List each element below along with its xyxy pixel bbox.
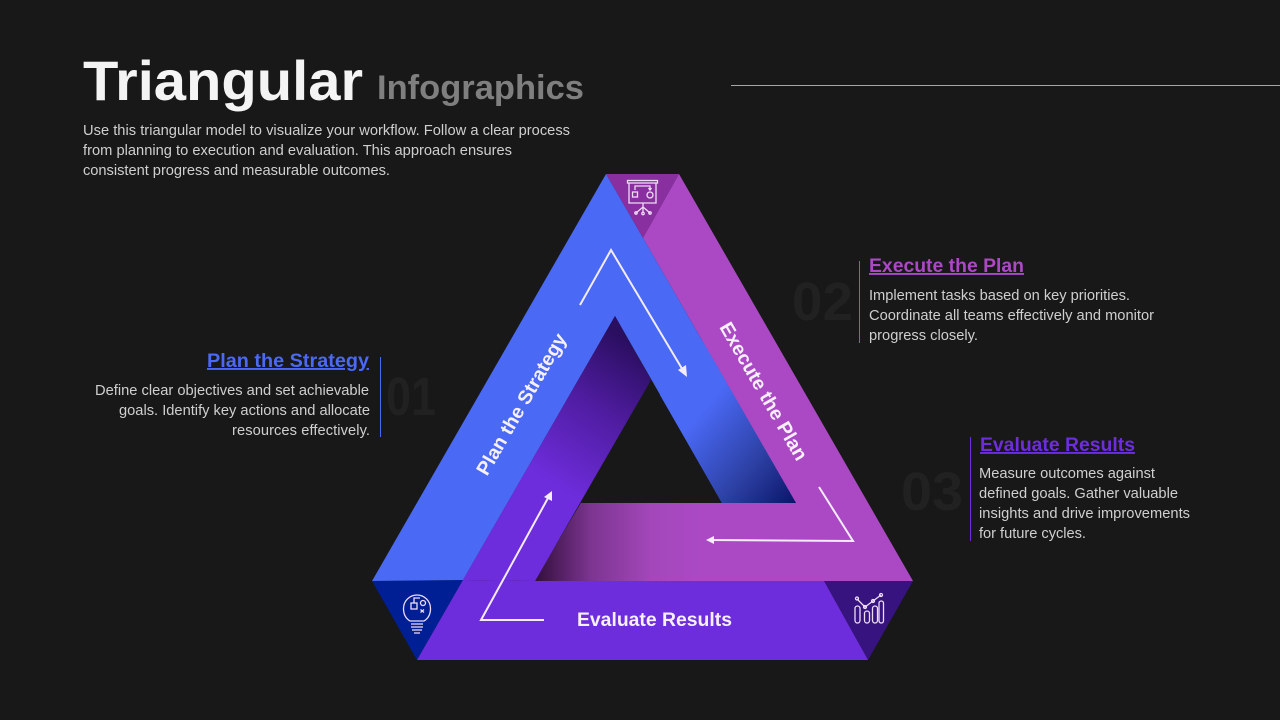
description: goals. Identify key actions and allocate <box>119 403 370 419</box>
description <box>869 288 1154 344</box>
intro text: consistent progress and measurable outcomes. <box>83 163 390 179</box>
description: Coordinate all teams effectively and monitor <box>869 308 1154 324</box>
label: evaluate results: Evaluate Results <box>577 609 732 631</box>
intro text <box>83 123 570 179</box>
description: Measure outcomes against <box>979 466 1155 482</box>
description: insights and drive improvements <box>979 506 1190 522</box>
description: for future cycles. <box>979 526 1086 542</box>
icon: bar chart with trend line <box>855 594 884 623</box>
panel: execute the plan <box>792 256 1154 344</box>
segment: execute band <box>535 174 913 581</box>
heading: Evaluate Results <box>980 435 1135 456</box>
description: Implement tasks based on key priorities. <box>869 288 1130 304</box>
intro text: Use this triangular model to visualize your workflow. Follow a clear process <box>83 123 570 139</box>
panel: plan the strategy <box>95 351 436 439</box>
segment: evaluate band <box>417 316 868 660</box>
title: Triangular <box>83 49 363 112</box>
title <box>83 49 584 112</box>
description <box>95 383 370 439</box>
segment: top corner <box>606 174 679 238</box>
icon: presentation board <box>628 180 658 215</box>
number 03: 03 <box>901 462 963 522</box>
panel: evaluate results <box>901 435 1190 542</box>
number 01: 01 <box>386 367 436 427</box>
segment: plan band <box>372 174 796 581</box>
icon: light bulb <box>404 595 430 633</box>
arrow: plan <box>580 250 687 377</box>
description: resources effectively. <box>232 423 370 439</box>
plan band shaded end <box>660 340 796 503</box>
triangular diagram <box>372 174 913 660</box>
number 02: 02 <box>792 272 853 332</box>
title: Infographics <box>377 69 584 107</box>
segment: left-bottom corner <box>372 580 463 660</box>
heading: Execute the Plan <box>869 256 1024 277</box>
label: plan the strategy: Plan the Strategy <box>472 330 571 479</box>
description: progress closely. <box>869 328 978 344</box>
heading: Plan the Strategy <box>207 351 369 372</box>
arrow: evaluate <box>481 491 552 620</box>
description: Define clear objectives and set achievable <box>95 383 369 399</box>
arrow: execute <box>706 487 853 544</box>
description <box>979 466 1190 542</box>
label: execute the plan: Execute the Plan <box>715 318 812 465</box>
description: defined goals. Gather valuable <box>979 486 1178 502</box>
intro text: from planning to execution and evaluation. This approach ensures <box>83 143 512 159</box>
segment: right-bottom corner <box>824 581 913 660</box>
